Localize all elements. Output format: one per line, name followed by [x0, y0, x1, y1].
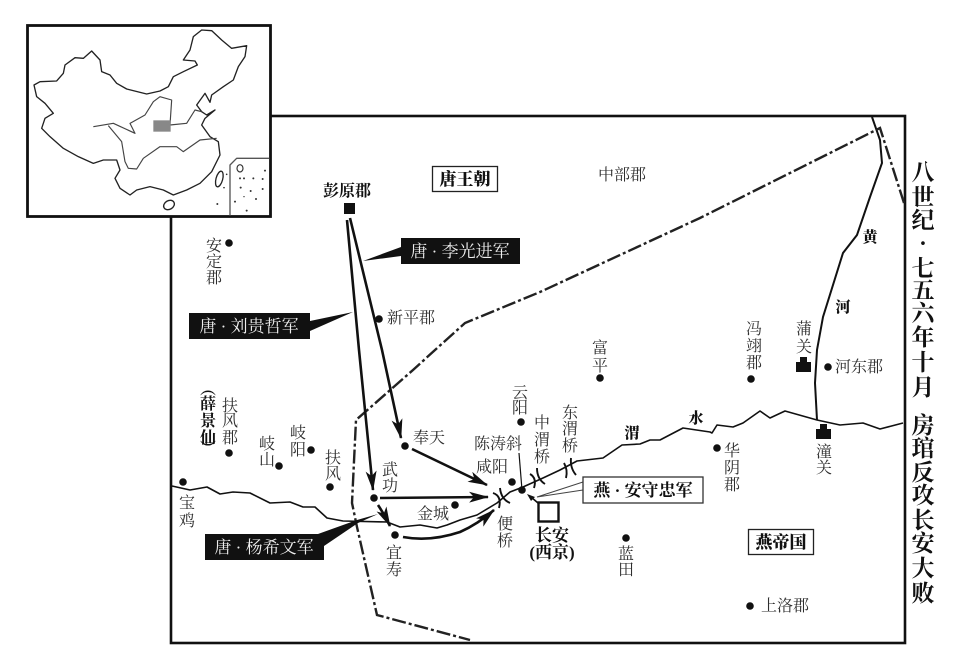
- label: Tongguan: 潼关: [816, 443, 832, 477]
- river label: Wei: [624, 409, 704, 442]
- city: Pengyuan: [323, 181, 371, 214]
- South China Sea box: [230, 158, 269, 216]
- arrow: Pengyuan to Fengtian: [350, 218, 401, 438]
- label: Jincheng: [417, 501, 459, 523]
- label: Tongguan: [816, 424, 832, 477]
- Taiwan: [214, 170, 225, 188]
- Yellow River in inset: [93, 97, 202, 133]
- label: Fengtian: 奉天: [413, 429, 445, 447]
- Chang'an city: [527, 494, 575, 562]
- Yangtze in inset: [108, 126, 217, 169]
- region label: Yan empire: [748, 530, 814, 554]
- label: Lantian: 蓝田: [618, 544, 634, 579]
- label: Xianyang: 咸阳: [476, 458, 508, 476]
- arrow: Wugong to Yishou: [378, 505, 390, 526]
- callout: Yan general An Shouzhong: [537, 477, 703, 503]
- river label: Yellow River: 黄: [862, 228, 880, 246]
- label: Baoji: [179, 478, 195, 530]
- label: Fufeng commandery: 扶风郡: [222, 397, 238, 447]
- label: Dongwei bridge: 东渭桥: [562, 404, 578, 455]
- label: Chentaoxie: 陈涛斜: [474, 435, 522, 453]
- shaded area of the main map: [153, 120, 171, 132]
- label: Huayin: 华阴郡: [724, 442, 740, 494]
- label: Puguan: 蒲关: [796, 320, 812, 356]
- river label: Wei: 水: [688, 409, 704, 427]
- panel: inset locator map of China: [28, 26, 270, 216]
- Chang'an city: (西京): [529, 542, 575, 562]
- label: Hedong: 河东郡: [835, 358, 883, 376]
- Hainan: [162, 198, 176, 212]
- callout: Tang general Liu Guizhe: [189, 312, 353, 339]
- callout: Yan general An Shouzhong: 燕 · 安守忠军: [593, 480, 693, 500]
- city: Pengyuan: 彭原郡: [323, 181, 371, 200]
- arrow: Yishou to Bianqiao: [403, 510, 494, 539]
- title: vertical heading: 八世纪·七五六年十月房琯反攻长安大败: [912, 160, 936, 606]
- callout: Tang general Yang Xiwen: 唐 · 杨希文军: [214, 537, 314, 557]
- river label: Wei: 渭: [624, 424, 640, 442]
- label: Xinping: 新平郡: [387, 309, 435, 327]
- label: Anding: [206, 237, 233, 287]
- China outline: [34, 30, 247, 195]
- river label: Yellow River: 河: [835, 299, 851, 316]
- Chang'an city: 长安: [535, 526, 570, 545]
- river label: Yellow River: [835, 228, 880, 316]
- callout: Tang general Li Guangjin: [363, 238, 520, 264]
- label: Yunyang: 云阳: [512, 384, 528, 417]
- Wei River: [172, 411, 903, 528]
- label: Huayin: [713, 442, 740, 494]
- arrow: Wugong to Bianqiao: [380, 497, 488, 498]
- label: Jincheng: 金城: [417, 505, 449, 523]
- city dots and labels: [179, 166, 883, 615]
- label: Fengtian: [401, 429, 445, 450]
- region label: Yan empire: 燕帝国: [756, 532, 806, 552]
- label: Bianqiao: 便桥: [497, 515, 513, 550]
- callout: Tang general Liu Guizhe: 唐 · 刘贵哲军: [199, 317, 299, 336]
- region label: Tang dynasty: 唐王朝: [440, 169, 490, 189]
- Sea islands: [216, 165, 266, 212]
- label: Xue Jingxian: ︵薛景仙︶: [200, 381, 217, 458]
- label: Qishan: [259, 435, 283, 470]
- region label: Tang dynasty: [432, 166, 498, 192]
- arrow: Fengtian to Bianqiao: [412, 449, 487, 485]
- label: Qiyang: 岐阳: [290, 424, 306, 459]
- label: Wugong: [370, 461, 398, 502]
- label: Zhongbu: 中部郡: [598, 166, 646, 184]
- label: Baoji: 宝鸡: [179, 494, 195, 530]
- label: Chentaoxie: [474, 435, 526, 494]
- label: Yishou: 宜寿: [386, 544, 402, 579]
- label: Puguan: [796, 320, 812, 372]
- label: Xianyang: [476, 458, 516, 486]
- callout: Tang general Li Guangjin: 唐 · 李光进军: [410, 242, 510, 261]
- label: Fengyi: 冯翊郡: [746, 320, 762, 372]
- border between Tang and Yan: [352, 128, 904, 640]
- label: Fuping: 富平: [592, 338, 608, 375]
- label: Qiyang: [290, 424, 315, 459]
- label: Qishan: 岐山: [259, 435, 275, 469]
- bridges on the Wei River: [493, 458, 576, 508]
- label: Fufeng: 扶风: [325, 449, 341, 483]
- label: Wugong: 武功: [382, 461, 398, 495]
- arrow: Pengyuan to Wugong: [347, 220, 373, 490]
- label: Zhongwei bridge: 中渭桥: [534, 414, 550, 466]
- panel: main map frame: [171, 116, 905, 643]
- label: Anding: 安定郡: [206, 237, 222, 287]
- Yellow River: [815, 117, 882, 420]
- callout: Tang general Yang Xiwen: [205, 514, 378, 560]
- label: Shangluo: 上洛郡: [761, 597, 809, 615]
